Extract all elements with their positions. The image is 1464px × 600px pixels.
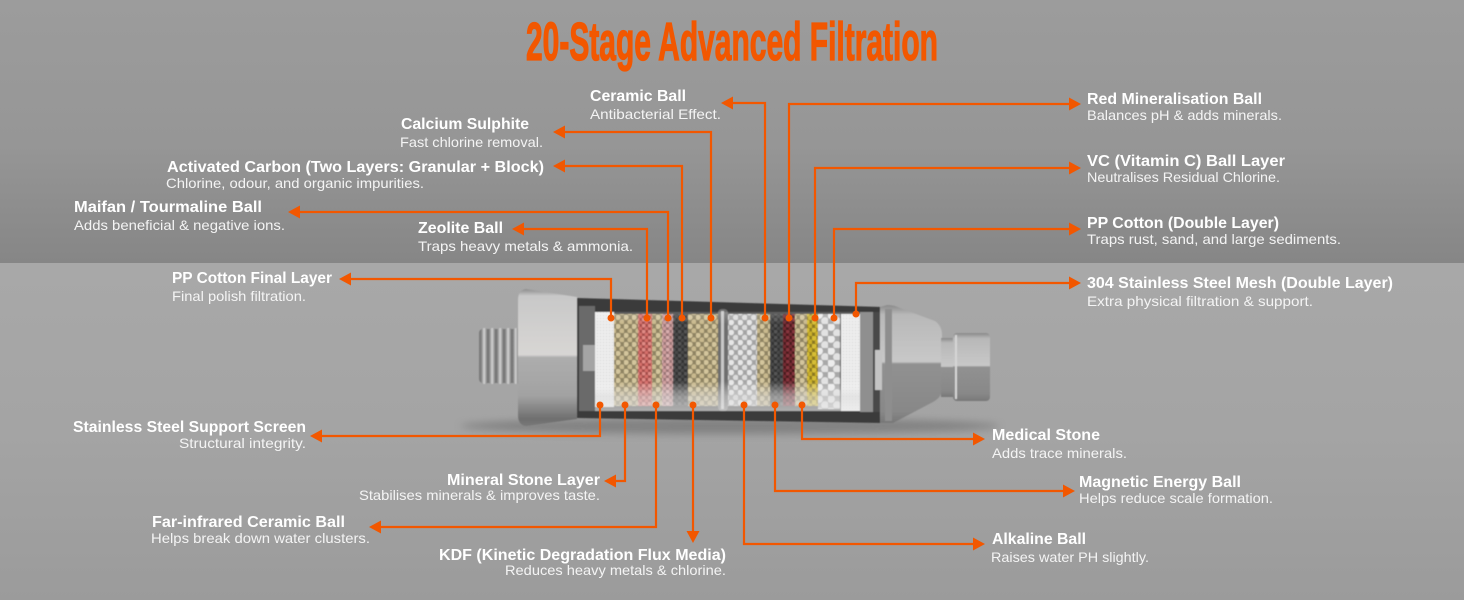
callout: VC (Vitamin C) Ball Layer: VC (Vitamin C) Ball Layer	[1087, 153, 1285, 170]
callout: PP Cotton (Double Layer)	[830, 215, 1341, 322]
callout: Medical Stone: Adds trace minerals.	[992, 445, 1127, 461]
filter media layers	[595, 309, 860, 411]
callout: Calcium Sulphite	[400, 116, 714, 322]
callout: Mineral Stone Layer: Mineral Stone Layer	[447, 472, 600, 489]
callout: PP Cotton (Double Layer): Traps rust, sand, and large sediments.	[1087, 231, 1341, 247]
callout: PP Cotton (Double Layer): PP Cotton (Double Layer)	[1087, 215, 1279, 232]
callout: Far-infrared Ceramic Ball: Helps break down water clusters.	[151, 530, 370, 546]
callout: VC (Vitamin C) Ball Layer	[812, 153, 1285, 322]
product: shower filter cartridge	[460, 289, 1000, 434]
callout: Calcium Sulphite: Calcium Sulphite	[401, 116, 529, 133]
title: 20-Stage Advanced Filtration	[526, 12, 938, 72]
callout: PP Cotton Final Layer: Final polish filtration.	[172, 288, 306, 304]
callout: Stainless Steel Support Screen	[73, 402, 604, 451]
callout: PP Cotton Final Layer: PP Cotton Final Layer	[172, 270, 332, 287]
callout: Zeolite Ball: Traps heavy metals & ammonia.	[418, 238, 633, 254]
callout: Stainless Steel Support Screen: Stainless Steel Support Screen	[73, 419, 306, 436]
callout: KDF	[439, 402, 726, 578]
callout: Medical Stone	[798, 402, 1127, 461]
callout: Mineral Stone Layer	[359, 402, 628, 503]
callout: Red Mineralisation Ball	[786, 91, 1282, 322]
callout: Red Mineralisation Ball: Red Mineralisation Ball	[1087, 91, 1262, 108]
callout: Alkaline Ball	[740, 402, 1149, 565]
callout: PP Cotton Final Layer	[172, 270, 614, 322]
callout: Alkaline Ball: Raises water PH slightly.	[991, 549, 1149, 565]
callout: Calcium Sulphite: Fast chlorine removal.	[400, 134, 543, 150]
left metal cap	[518, 289, 577, 426]
callout: Far-infrared Ceramic Ball	[151, 402, 660, 546]
callout: Alkaline Ball: Alkaline Ball	[992, 531, 1086, 548]
right neck and nut	[941, 333, 990, 401]
callout: Maifan / Tourmaline Ball: Adds beneficial & negative ions.	[74, 217, 285, 233]
left threaded connector	[479, 328, 519, 384]
callout: 304 Stainless Steel Mesh: Extra physical filtration & support.	[1087, 293, 1313, 309]
callout: Mineral Stone Layer: Stabilises minerals & improves taste.	[359, 487, 600, 503]
callout: Magnetic Energy Ball	[772, 402, 1273, 506]
callout: Magnetic Energy Ball: Helps reduce scale formation.	[1079, 490, 1273, 506]
callout: Maifan / Tourmaline Ball	[74, 199, 672, 322]
callout: 304 Stainless Steel Mesh: 304 Stainless Steel Mesh (Double Layer)	[1087, 275, 1393, 292]
right metal cap	[880, 305, 942, 423]
callout: Medical Stone: Medical Stone	[992, 427, 1100, 444]
callout: Maifan / Tourmaline Ball: Maifan / Tourmaline Ball	[74, 199, 262, 216]
callout: KDF: Reduces heavy metals & chlorine.	[505, 562, 726, 578]
callout: Activated Carbon	[166, 159, 686, 322]
callout: Ceramic Ball	[590, 88, 768, 322]
callout: Activated Carbon: Activated Carbon (Two Layers: Granular + Block)	[167, 159, 544, 176]
callout: Activated Carbon: Chlorine, odour, and organic impurities.	[166, 175, 424, 191]
callout: Stainless Steel Support Screen: Structural integrity.	[179, 435, 306, 451]
callout: Ceramic Ball: Antibacterial Effect.	[590, 106, 721, 122]
callout: Zeolite Ball: Zeolite Ball	[418, 220, 503, 237]
callout: Zeolite Ball	[418, 220, 650, 322]
callout: 304 Stainless Steel Mesh	[852, 275, 1393, 318]
callout: Magnetic Energy Ball: Magnetic Energy Ball	[1079, 474, 1241, 491]
callout: Far-infrared Ceramic Ball: Far-infrared Ceramic Ball	[152, 514, 345, 531]
callout: Ceramic Ball: Ceramic Ball	[590, 88, 686, 105]
callout: KDF: KDF (Kinetic Degradation Flux Media)	[439, 547, 726, 564]
callout: Red Mineralisation Ball: Balances pH & adds minerals.	[1087, 107, 1282, 123]
callout: VC (Vitamin C) Ball Layer: Neutralises Residual Chlorine.	[1087, 169, 1280, 185]
glass tube	[577, 298, 882, 423]
